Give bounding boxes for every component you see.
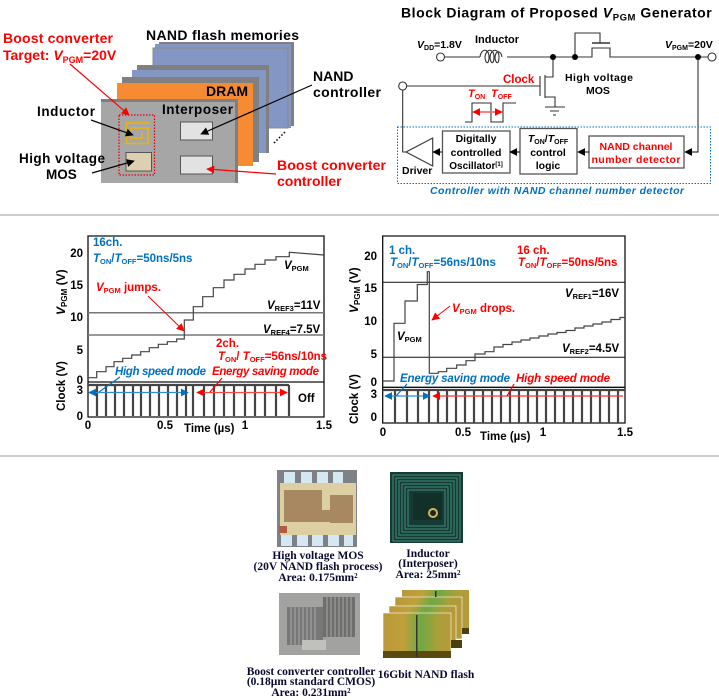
- label: VPGM: V: [397, 331, 406, 343]
- annotation: 2 channel: 2ch.: [216, 338, 239, 350]
- circuit junction dots: [550, 54, 701, 60]
- y-axis title: VPGM: V: [347, 304, 361, 313]
- driver label: Driver: [402, 165, 432, 177]
- label: VPGM: V: [284, 260, 293, 272]
- x-axis ticks: 0: [85, 420, 91, 432]
- label: High voltage MOS: MOS: [46, 167, 77, 182]
- annotation: 16 channel: ON: [100, 257, 111, 266]
- annotation: VPGM drops: V: [452, 303, 461, 315]
- caption: boost converter controller: 2: [347, 687, 351, 695]
- y-axis title: VPGM: V: [54, 306, 68, 315]
- label: VREF3: =11V: [294, 300, 321, 312]
- supply labels: DD: [424, 45, 434, 52]
- label: energy saving mode: Energy saving mode: [400, 373, 511, 385]
- label: boost converter target: PGM: [63, 55, 83, 65]
- photo: high voltage MOS: [277, 470, 357, 547]
- y-axis ticks: 3: [371, 389, 377, 401]
- annotation: 16 channel: /: [536, 257, 540, 269]
- photo: boost converter controller: [279, 593, 360, 655]
- annotation: VPGM drops: drops.: [477, 303, 515, 315]
- reference lines: [383, 282, 625, 357]
- annotation: VPGM jumps: PGM: [104, 286, 121, 295]
- label: Off: Off: [298, 393, 315, 405]
- block: control logic: T: [548, 133, 556, 145]
- TON TOFF labels: T: [491, 88, 499, 100]
- y-axis ticks: 5: [77, 345, 84, 357]
- caption: high voltage MOS: Area: 0.175mm: [278, 572, 358, 584]
- label: boost converter target: Target:: [3, 47, 53, 63]
- caption: high voltage MOS: High voltage MOS: [272, 550, 364, 562]
- y-axis ticks: 10: [364, 316, 377, 328]
- block: NAND channel number detector: NAND channel: [600, 141, 673, 153]
- label: high speed mode: High speed mode: [516, 373, 611, 385]
- y-axis ticks: 0: [371, 412, 377, 424]
- circuit wiring: [399, 33, 716, 166]
- VPGM trace: [383, 272, 625, 381]
- caption: inductor: Inductor: [406, 548, 450, 560]
- high voltage MOS block: [126, 152, 152, 171]
- label: VREF2: =4.5V: [589, 343, 620, 355]
- block arrows: [433, 151, 698, 153]
- label: energy saving mode: Energy saving mode: [212, 366, 320, 378]
- block: digitally controlled oscillator: controlled: [451, 147, 501, 159]
- arrows: [70, 64, 312, 174]
- panel: right waveform chart: [347, 236, 634, 443]
- y-axis ticks: 5: [371, 349, 378, 361]
- chart frame: [88, 236, 324, 417]
- inductor icon: [126, 123, 150, 144]
- block: control logic: control: [530, 147, 566, 159]
- annotation: 16 channel: OFF: [547, 261, 562, 270]
- high voltage MOS label: High voltage: [565, 72, 633, 84]
- label: VPGM: PGM: [405, 335, 422, 344]
- annotation: 16 channel: T: [114, 253, 122, 265]
- y-axis ticks: 0: [77, 375, 83, 387]
- y-axis title: VPGM: PGM: [60, 288, 69, 307]
- y-axis title: Clock: Clock (V): [349, 374, 361, 424]
- label: VREF2: REF2: [570, 347, 589, 356]
- panel: chip photographs: [247, 470, 475, 699]
- output voltage label: =20V: [688, 39, 713, 51]
- block: control logic: logic: [536, 160, 560, 172]
- label: boost converter target: =20V: [83, 47, 117, 63]
- label: VREF1: V: [565, 288, 574, 300]
- panel: block diagram: [398, 4, 716, 197]
- annotation: 2 channel: =56ns/10ns: [265, 351, 327, 363]
- block: NAND channel number detector: number detector: [592, 154, 680, 166]
- annotation: 1 channel: 1 ch.: [389, 245, 415, 257]
- y-axis ticks: 20: [364, 251, 377, 263]
- photo: NAND flash stack: [383, 590, 469, 658]
- TON TOFF labels: ON: [475, 94, 485, 101]
- annotation: 16 channel: 16ch.: [93, 237, 122, 249]
- label: NAND controller: NAND: [313, 68, 353, 84]
- label: VREF4: REF4: [271, 328, 291, 337]
- block diagram title: Generator: [636, 4, 712, 20]
- annotation: 1 channel: =56ns/10ns: [434, 257, 496, 269]
- y-axis ticks: 20: [70, 248, 83, 260]
- annotation: 16 channel: OFF: [122, 257, 137, 266]
- controller dashed outline: [398, 127, 710, 184]
- x-axis ticks: [85, 420, 333, 432]
- DRAM layer: [117, 77, 259, 166]
- y-axis title: VPGM: (V): [347, 267, 361, 287]
- block: digitally controlled oscillator: [442, 131, 510, 173]
- label: Inductor: Inductor: [37, 104, 96, 119]
- label: High voltage MOS: High voltage: [19, 151, 105, 166]
- TON TOFF arrows: [473, 111, 502, 113]
- caption: inductor: 2: [457, 569, 461, 577]
- y-axis title: VPGM: (V): [54, 269, 68, 289]
- caption: high voltage MOS: (20V NAND flash process): [254, 561, 383, 573]
- x-axis title: Time (µs): [184, 423, 235, 435]
- controller caption: Controller with NAND channel number detector: [430, 185, 685, 197]
- annotation: VPGM jumps: V: [96, 282, 105, 294]
- controller chips: [180, 122, 212, 174]
- x-axis ticks: 1: [242, 420, 249, 432]
- block: digitally controlled oscillator: [1]: [495, 162, 503, 168]
- TON TOFF labels: T: [468, 88, 476, 100]
- clock trace: [88, 385, 289, 416]
- block: control logic: T: [528, 133, 536, 145]
- output voltage label: V: [665, 39, 673, 51]
- y-axis ticks: 3: [77, 385, 83, 397]
- annotation: 16 channel: T: [518, 257, 526, 269]
- caption: boost converter controller: (0.18µm standard CMOS): [247, 676, 375, 688]
- caption: NAND flash: 16Gbit NAND flash: [378, 669, 475, 681]
- inductor label: Inductor: [475, 34, 520, 46]
- block diagram title: Block Diagram of Proposed V: [401, 4, 613, 20]
- block: NAND channel number detector: [589, 136, 684, 168]
- annotation: 1 channel: ON: [397, 261, 408, 270]
- reference lines: [88, 313, 324, 335]
- block: control logic: [520, 128, 577, 174]
- block: digitally controlled oscillator: Oscillator: [449, 161, 503, 172]
- x-axis ticks: 1.5: [316, 420, 333, 432]
- label: VREF1: =16V: [592, 288, 619, 300]
- y-axis ticks: 0: [371, 377, 377, 389]
- y-axis ticks: 15: [70, 280, 84, 292]
- annotation: 1 channel: /: [408, 257, 412, 269]
- y-axis title: VPGM: PGM: [353, 286, 362, 305]
- block: control logic: ON: [534, 139, 545, 146]
- block: control logic: /: [545, 133, 548, 145]
- clock label: Clock: [503, 74, 535, 86]
- label: NAND controller: controller: [313, 84, 382, 100]
- x-axis ticks: 1: [540, 427, 547, 439]
- annotation: 16 channel: =50ns/5ns: [562, 257, 617, 269]
- clock trace: [383, 390, 625, 423]
- block: control logic: OFF: [554, 139, 569, 146]
- x-axis ticks: 0.5: [455, 427, 472, 439]
- y-axis ticks: 10: [70, 312, 83, 324]
- y-axis ticks: [364, 251, 378, 424]
- caption: inductor: Area: 25mm: [396, 569, 461, 581]
- label: Boost converter controller: Boost converter: [277, 157, 387, 173]
- interposer: [101, 99, 238, 183]
- label: VREF3: REF3: [275, 304, 294, 313]
- chart frame: [383, 236, 625, 423]
- label: DRAM: DRAM: [206, 83, 248, 99]
- x-axis ticks: 0.5: [157, 420, 174, 432]
- annotation: 1 channel: T: [411, 257, 419, 269]
- annotation: 16 channel: ON: [525, 261, 536, 270]
- annotation: VPGM drops: PGM: [460, 307, 477, 316]
- mode arrows: [89, 377, 287, 392]
- annotation: 1 channel: OFF: [419, 261, 434, 270]
- caption: high voltage MOS: 2: [354, 572, 358, 580]
- x-axis ticks: 0: [380, 427, 386, 439]
- block diagram title: PGM: [613, 12, 636, 24]
- annotation arrow: [432, 306, 450, 320]
- label: high speed mode: High speed mode: [115, 366, 207, 378]
- y-axis title: Clock: Clock (V): [56, 361, 68, 411]
- output voltage label: PGM: [672, 45, 688, 52]
- caption: boost converter controller: Area: 0.231mm: [271, 687, 351, 699]
- annotation: 2 channel: T: [218, 351, 226, 363]
- label: boost converter target: Boost converter: [3, 30, 114, 46]
- label: VPGM: PGM: [292, 264, 309, 273]
- label: VREF3: V: [267, 300, 276, 312]
- annotation: 2 channel: /: [236, 351, 243, 363]
- annotation: VPGM jumps: jumps.: [121, 282, 161, 294]
- x-axis ticks: [380, 427, 634, 439]
- annotation: 16 channel: /: [111, 253, 115, 265]
- y-axis ticks: 0: [77, 411, 83, 423]
- panel: left waveform chart: [54, 236, 333, 435]
- label: boost converter target: V: [53, 47, 64, 63]
- annotation: 16 channel: =50ns/5ns: [137, 253, 192, 265]
- annotation: 16 channel: 16 ch.: [517, 245, 550, 257]
- label: VREF2: V: [562, 343, 571, 355]
- high voltage MOS label: MOS: [586, 85, 610, 97]
- heading: NAND flash memories: NAND flash memories: [146, 27, 299, 43]
- annotation: 16 channel: T: [539, 257, 547, 269]
- label: VREF4: =7.5V: [290, 324, 321, 336]
- mode arrows: [385, 384, 623, 396]
- annotation: 16 channel: T: [93, 253, 101, 265]
- panel: stacked package diagram: [3, 27, 387, 189]
- VPGM trace: [88, 252, 324, 378]
- block: digitally controlled oscillator: Digitally: [456, 133, 497, 145]
- NAND flash memory layers: [132, 42, 294, 153]
- annotation arrow: [148, 296, 184, 331]
- TON TOFF labels: OFF: [498, 94, 512, 101]
- label: VREF1: REF1: [573, 292, 592, 301]
- annotation: 2 channel: T: [243, 351, 251, 363]
- caption: inductor: (Interposer): [398, 558, 458, 570]
- x-axis ticks: 1.5: [617, 427, 634, 439]
- annotation: 1 channel: T: [390, 257, 398, 269]
- y-axis ticks: [70, 248, 84, 423]
- label: Boost converter controller: controller: [277, 173, 342, 189]
- y-axis ticks: 15: [364, 283, 378, 295]
- photo: inductor: [390, 472, 463, 543]
- caption: boost converter controller: Boost converter controller: [247, 666, 375, 678]
- supply labels: V: [417, 39, 425, 51]
- label: Interposer: Interposer: [162, 102, 234, 117]
- annotation: 2 channel: OFF: [250, 355, 265, 364]
- annotation: 2 channel: ON: [225, 355, 236, 364]
- supply labels: =1.8V: [434, 39, 462, 51]
- label: VREF4: V: [263, 324, 272, 336]
- x-axis title: Time (µs): [480, 431, 531, 443]
- boost converter outline: [119, 115, 154, 175]
